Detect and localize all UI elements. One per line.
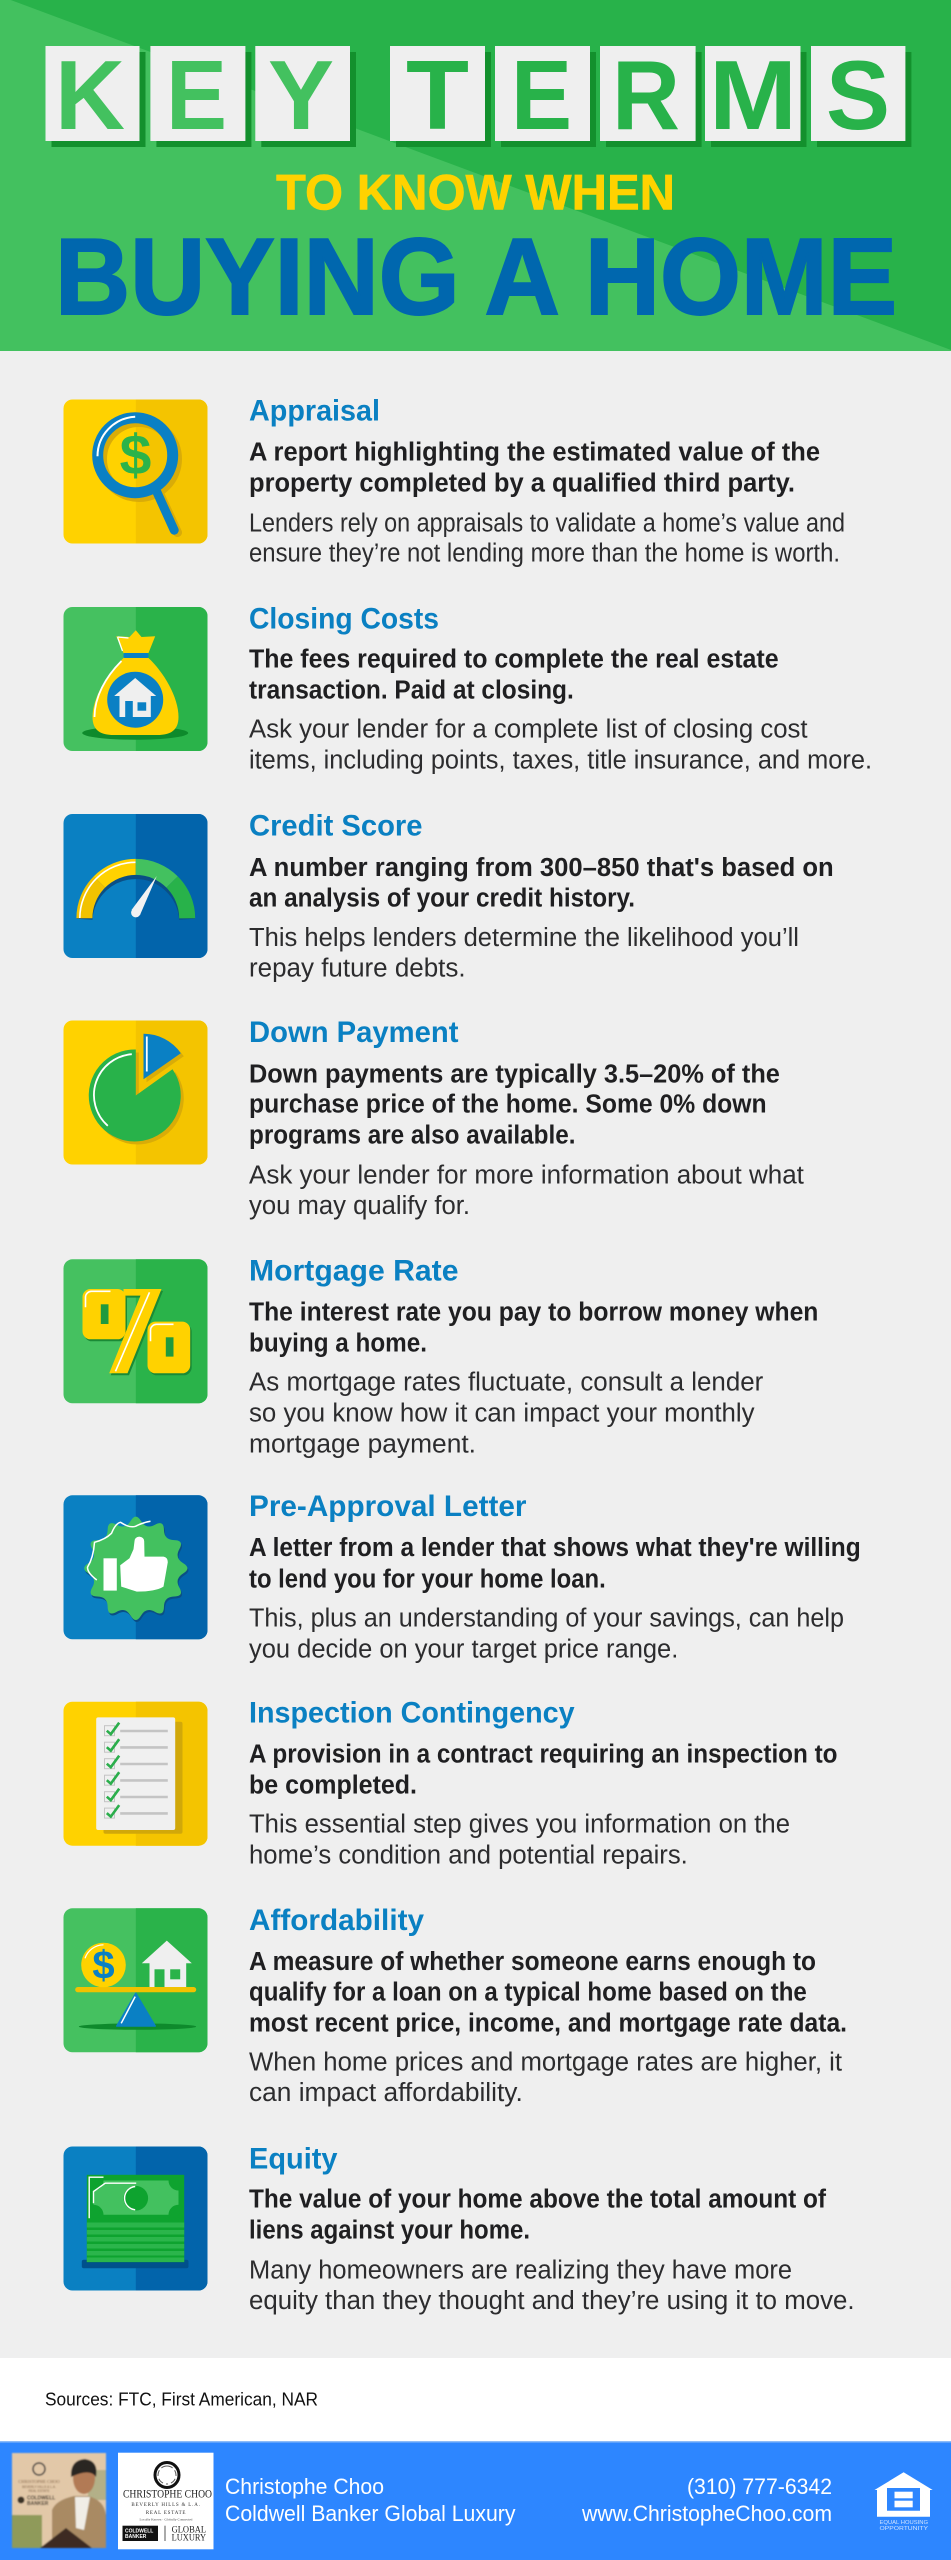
definition: The fees required to complete the real estate <box>249 645 779 673</box>
heading: Pre-Approval Letter: Pre-Approval Letter <box>249 1490 527 1523</box>
contact details <box>581 2474 832 2526</box>
icon: pie chart with removed slice <box>64 1020 208 1164</box>
panel: Pre-Approval Letter <box>64 1490 861 1663</box>
note <box>249 510 845 568</box>
icon: magnifying glass with dollar sign <box>64 400 208 544</box>
heading: Equity: Equity <box>249 2142 338 2175</box>
definition: transaction. Paid at closing. <box>249 676 574 704</box>
icon: equal housing opportunity <box>874 2472 933 2532</box>
note: repay future debts. <box>249 955 466 983</box>
definition <box>249 1741 838 1799</box>
subtitle: to know when: TO KNOW WHEN <box>276 164 675 220</box>
agent photo: COLDWELL <box>27 2496 55 2502</box>
title: buying a home: BUYING A HOME <box>55 216 897 338</box>
note <box>249 1811 790 1869</box>
note: can impact affordability. <box>249 2079 523 2107</box>
agent photo <box>12 2453 106 2548</box>
note: This essential step gives you information on the <box>249 1811 790 1839</box>
note: As mortgage rates fluctuate, consult a lender <box>249 1369 764 1397</box>
agent photo: CHRISTOPHE CHOO <box>18 2479 61 2484</box>
brokerage logo: BEVERLY HILLS & L.A. <box>131 2503 201 2508</box>
note <box>249 1161 804 1220</box>
agent photo: BEVERLY HILLS & L.A. <box>22 2485 56 2489</box>
definition: A number ranging from 300–850 that's based on <box>249 854 834 882</box>
definition: programs are also available. <box>249 1121 576 1149</box>
note <box>249 2049 842 2107</box>
heading: Inspection Contingency: Inspection Contingency <box>249 1697 575 1730</box>
note <box>249 2256 854 2315</box>
header banner <box>0 0 951 351</box>
agent name and company <box>225 2474 516 2526</box>
definition <box>249 2185 826 2244</box>
sources band <box>0 2358 951 2442</box>
agent name and company: Christophe Choo <box>225 2474 384 2499</box>
title: KEY TERMS letter tiles: M <box>709 40 797 150</box>
note <box>249 1369 764 1458</box>
definition: property completed by a qualified third party. <box>249 470 795 498</box>
definition <box>249 854 834 913</box>
footer bar <box>0 2441 951 2560</box>
definition: A report highlighting the estimated value of the <box>249 439 820 467</box>
definition: A provision in a contract requiring an inspection to <box>249 1741 838 1769</box>
definition: to lend you for your home loan. <box>249 1565 606 1593</box>
heading: Appraisal: Appraisal <box>249 395 380 428</box>
definition <box>249 1299 818 1358</box>
definition: qualify for a loan on a typical home based on the <box>249 1979 807 2007</box>
icon: stack of money <box>64 2146 208 2290</box>
definition <box>249 1948 847 2038</box>
brokerage logo: REAL ESTATE <box>146 2511 186 2516</box>
brokerage logo: BANKER <box>125 2534 147 2540</box>
title: KEY TERMS letter tiles: R <box>612 40 680 150</box>
note: This helps lenders determine the likelihood you’ll <box>249 924 799 952</box>
icon: balance scale with coin and house: $ <box>92 1943 115 1987</box>
title: KEY TERMS letter tiles: K <box>55 40 125 150</box>
note: you may qualify for. <box>249 1192 470 1220</box>
note: home’s condition and potential repairs. <box>249 1841 688 1869</box>
definition <box>249 645 779 704</box>
icon: percent sign <box>64 1259 208 1403</box>
brokerage logo: CHRISTOPHE CHOO <box>123 2489 212 2501</box>
panel: Inspection Contingency <box>64 1697 838 1869</box>
note: so you know how it can impact your monthly <box>249 1400 755 1428</box>
note: items, including points, taxes, title insurance, and more. <box>249 746 872 774</box>
contact details: www.ChristopheChoo.com <box>581 2501 832 2526</box>
note: you decide on your target price range. <box>249 1635 678 1663</box>
icon: credit score gauge <box>64 814 208 958</box>
icon: badge with thumbs up <box>64 1495 208 1639</box>
definition <box>249 439 820 498</box>
title: KEY TERMS letter tiles: S <box>826 40 890 150</box>
panel: Closing Costs <box>64 602 872 774</box>
panel: Mortgage Rate <box>64 1255 818 1458</box>
percent holes <box>101 1304 174 1357</box>
note: When home prices and mortgage rates are higher, it <box>249 2049 842 2077</box>
definition: liens against your home. <box>249 2216 530 2244</box>
title: KEY TERMS letter tiles: T <box>406 40 469 150</box>
brokerage logo <box>118 2453 214 2549</box>
title: KEY TERMS letter tiles <box>46 40 911 150</box>
note: equity than they thought and they’re using it to move. <box>249 2287 854 2315</box>
panel: Equity <box>64 2142 854 2315</box>
contact details: (310) 777-6342 <box>687 2474 832 2499</box>
definition: buying a home. <box>249 1330 427 1358</box>
note: Ask your lender for more information about what <box>249 1161 804 1189</box>
icon: balance scale with coin and house <box>64 1908 208 2052</box>
title: KEY TERMS letter tiles: Y <box>268 40 334 150</box>
note: Ask your lender for a complete list of closing cost <box>249 716 808 744</box>
definition: purchase price of the home. Some 0% down <box>249 1091 767 1119</box>
brokerage logo: GLOBAL <box>172 2526 206 2536</box>
definition: A measure of whether someone earns enough to <box>249 1948 816 1976</box>
definition: an analysis of your credit history. <box>249 885 635 913</box>
title: KEY TERMS letter tiles: E <box>511 40 572 150</box>
note: This, plus an understanding of your savings, can help <box>249 1605 844 1633</box>
brokerage logo: LUXURY <box>172 2534 206 2544</box>
definition <box>249 1061 780 1149</box>
brokerage logo: COLDWELL <box>125 2528 153 2534</box>
definition: A letter from a lender that shows what they're willing <box>249 1534 861 1562</box>
heading: Closing Costs: Closing Costs <box>249 602 439 635</box>
note <box>249 716 872 774</box>
title: KEY TERMS letter tiles: E <box>166 40 227 150</box>
note: Many homeowners are realizing they have more <box>249 2256 792 2284</box>
panel: Affordability <box>64 1904 847 2107</box>
definition: most recent price, income, and mortgage rate data. <box>249 2010 847 2038</box>
agent photo: BANKER <box>27 2501 49 2507</box>
agent name and company: Coldwell Banker Global Luxury <box>225 2501 516 2526</box>
definition: The value of your home above the total amount of <box>249 2185 826 2213</box>
definition: be completed. <box>249 1771 417 1799</box>
icon: equal housing opportunity: OPPORTUNITY <box>880 2526 928 2532</box>
agent photo: REAL ESTATE <box>28 2489 50 2493</box>
icon: equal housing opportunity: EQUAL HOUSING <box>880 2520 928 2526</box>
panel: Appraisal <box>64 395 845 568</box>
note <box>249 1605 844 1663</box>
note <box>249 924 799 983</box>
sources text: Sources: FTC, First American, NAR <box>45 2390 318 2410</box>
note: mortgage payment. <box>249 1430 476 1458</box>
heading: Credit Score: Credit Score <box>249 810 422 843</box>
definition: The interest rate you pay to borrow money when <box>249 1299 818 1327</box>
note: Lenders rely on appraisals to validate a home’s value and <box>249 510 845 538</box>
icon: magnifying glass with dollar sign: $ <box>120 424 151 488</box>
definition: Down payments are typically 3.5–20% of the <box>249 1061 780 1089</box>
brokerage logo: Locally Known · Globally Connected <box>140 2518 193 2522</box>
icon: money bag with house <box>64 607 208 751</box>
icon: inspection checklist <box>64 1702 208 1846</box>
note: ensure they’re not lending more than the home is worth. <box>249 540 840 568</box>
panel: Credit Score <box>64 810 834 983</box>
heading: Down Payment: Down Payment <box>249 1016 459 1049</box>
definition <box>249 1534 861 1593</box>
panel: Down Payment <box>64 1016 804 1220</box>
heading: Mortgage Rate: Mortgage Rate <box>249 1255 458 1288</box>
heading: Affordability: Affordability <box>249 1904 425 1937</box>
